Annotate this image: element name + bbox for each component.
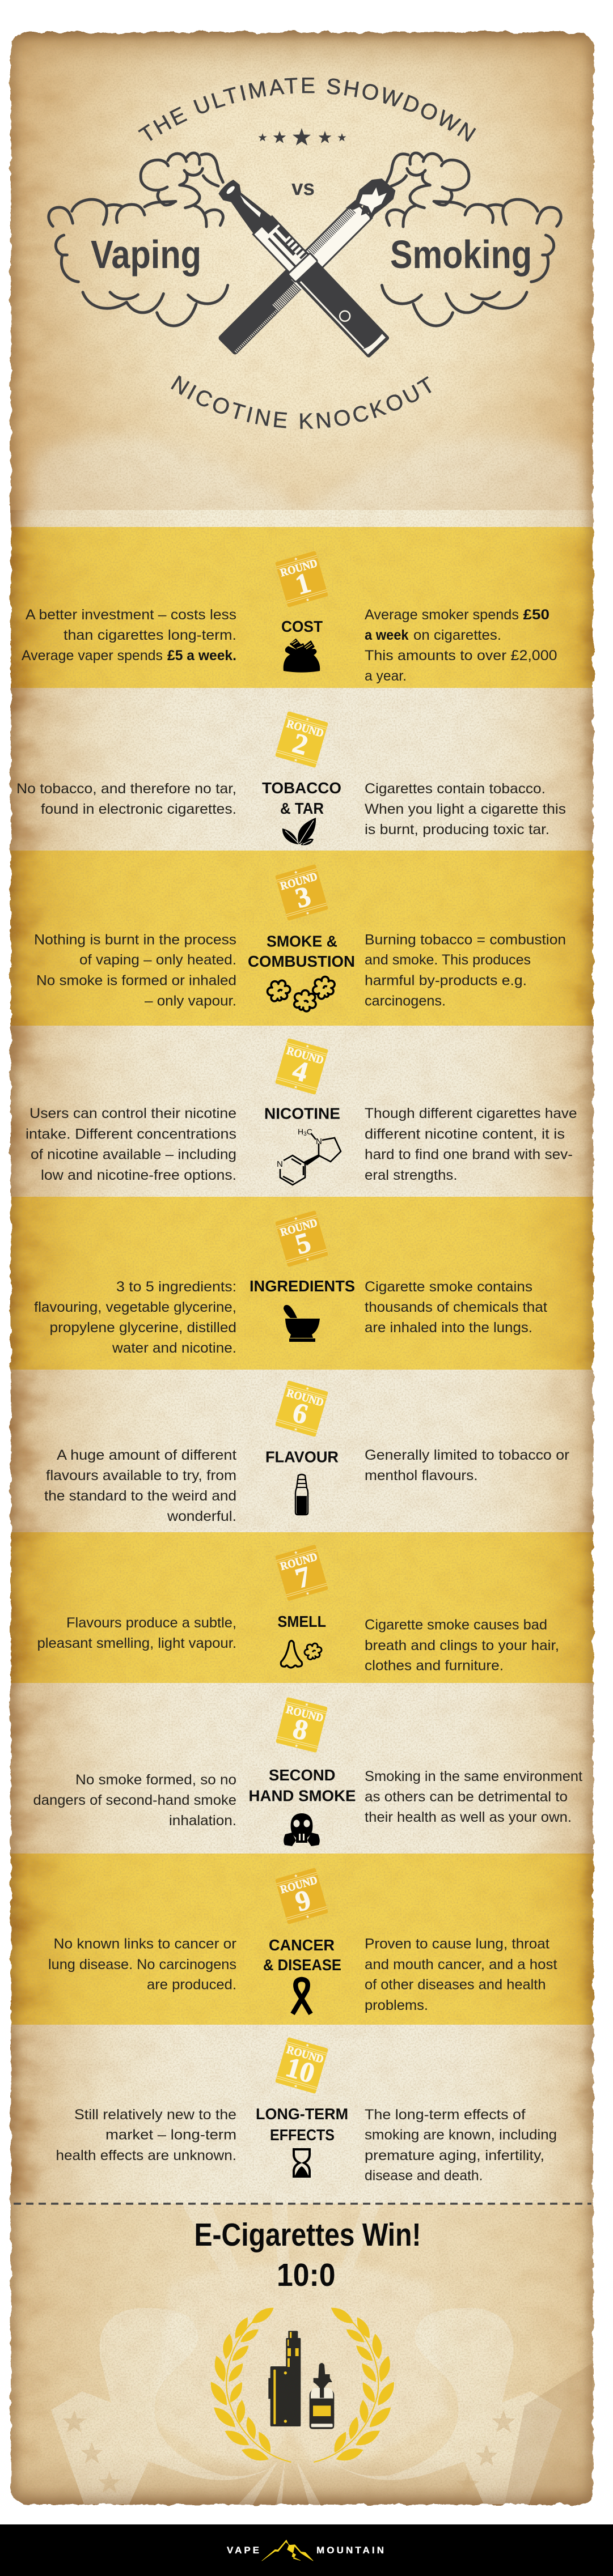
round badge 5 [275, 1210, 328, 1267]
icon: vaping cloud [49, 153, 228, 326]
vaping text: flavouring, vegetable glycerine, [34, 1299, 236, 1315]
vaping text: pleasant smelling, light vapour. [37, 1635, 236, 1651]
vaping text [37, 1615, 236, 1651]
heading: NICOTINE [264, 1105, 340, 1122]
icon: nicotine molecule: H [298, 1127, 303, 1136]
icon: mountain logo [262, 2540, 313, 2561]
heading [256, 2105, 348, 2144]
result heading [194, 2217, 421, 2293]
smoking text: The long-term effects of [365, 2107, 526, 2123]
icon: mortar and pestle [284, 1305, 320, 1342]
vaping text: market – long-term [105, 2127, 236, 2143]
smoking text: smoking are known, including [365, 2127, 557, 2143]
round badge 7 [275, 1544, 328, 1601]
vaping text: Average vaper spends [22, 648, 163, 664]
heading: HAND SMOKE [248, 1787, 356, 1804]
round badge 8 [276, 1697, 328, 1753]
icon: nose and smell puff [281, 1641, 324, 1668]
smoking text: and smoke. This produces [365, 952, 531, 968]
smoking text [365, 1447, 569, 1483]
vaping text [22, 607, 236, 664]
round badge 4: 4 [289, 1053, 312, 1088]
vaping text: No smoke is formed or inhaled [36, 972, 236, 988]
header title block [49, 74, 561, 434]
vaping label: Vaping [91, 232, 201, 277]
round badge 10: ROUND [285, 2043, 325, 2066]
icon: smoke puffs [265, 973, 339, 1014]
smoking text: eral strengths. [365, 1167, 457, 1183]
title arc: the ultimate showdown: THE ULTIMATE SHOWDOWN [138, 77, 476, 142]
round badge 7: 7 [291, 1560, 314, 1595]
icon: nicotine molecule: N [277, 1159, 283, 1169]
heading: & TAR [280, 800, 324, 817]
panel: round 1 cost [22, 551, 557, 684]
heading: TOBACCO [262, 779, 341, 797]
smoking text: Cigarette smoke causes bad [365, 1617, 547, 1633]
icon: nicotine molecule: N [316, 1137, 322, 1146]
heading: INGREDIENTS [250, 1277, 355, 1295]
heading [263, 1936, 341, 1974]
vaping text: found in electronic cigarettes. [41, 801, 236, 817]
logo word: mountain: MOUNTAIN [316, 2545, 384, 2556]
icon: e-cigarette [214, 175, 390, 359]
round badge 9: 9 [291, 1883, 314, 1918]
smoking text: Proven to cause lung, throat [365, 1936, 549, 1952]
panel: round 2 tobacco and tar [16, 711, 566, 845]
heading: SMOKE & [267, 933, 337, 950]
round badge 7: ROUND [279, 1550, 319, 1573]
vaping text: lung disease. No carcinogens [48, 1957, 236, 1973]
ghost boxing gloves and rays [51, 2204, 593, 2505]
smoking text: is burnt, producing toxic tar. [365, 822, 549, 838]
vaping text: intake. Different concentrations [26, 1127, 236, 1142]
vaping text [16, 781, 236, 817]
vaping text: propylene glycerine, distilled [50, 1320, 236, 1336]
smoking text: different nicotine content, it is [365, 1127, 565, 1142]
smoking text: menthol flavours. [365, 1468, 477, 1483]
heading: & DISEASE [263, 1956, 341, 1974]
round badge 10: 10 [282, 2051, 319, 2089]
round badge 6: ROUND [285, 1387, 325, 1409]
vaping text [56, 2107, 236, 2163]
smoking text: on cigarettes. [413, 627, 501, 643]
subtitle arc: nicotine knockout [121, 343, 487, 434]
round badge 3: ROUND [279, 870, 319, 892]
heading: CANCER [269, 1936, 335, 1954]
smoking text [365, 1279, 547, 1336]
round badge 1: ROUND [279, 557, 319, 579]
smoking text [365, 932, 566, 1009]
heading: SECOND [269, 1766, 336, 1784]
result heading: 10:0 [277, 2257, 336, 2293]
panel: round 7 smell [37, 1544, 559, 1674]
icon: awareness ribbon [293, 1979, 311, 2014]
panel: round 9 cancer and disease [48, 1868, 557, 2014]
round badge 6 [275, 1380, 328, 1437]
pale smoke shape above first round [23, 436, 590, 535]
smoking text: their health as well as your own. [365, 1809, 572, 1825]
vaping text: of vaping – only heated. [79, 952, 236, 968]
round badge 5: ROUND [279, 1217, 319, 1239]
vaping text: flavours available to try, from [46, 1468, 236, 1483]
icon: gas mask [284, 1813, 320, 1846]
vaping text: inhalation. [169, 1813, 236, 1829]
vaping text: Users can control their nicotine [29, 1106, 236, 1121]
heading: LONG-TERM [256, 2105, 348, 2123]
vaping text: are produced. [147, 1976, 236, 1992]
heading: COMBUSTION [248, 953, 355, 970]
vaping text: health effects are unknown. [56, 2148, 236, 2163]
smoking text: £50 [523, 607, 549, 623]
vaping text: No tobacco, and therefore no tar, [16, 781, 236, 797]
smoking text: disease and death. [365, 2168, 483, 2184]
vaping text [33, 1772, 236, 1829]
smoking text: are inhaled into the lungs. [365, 1320, 532, 1336]
smoking text: a week [365, 627, 409, 643]
heading: COST [281, 618, 323, 635]
result heading: E-Cigarettes Win! [194, 2217, 421, 2253]
smoking text: This amounts to over £2,000 [365, 648, 557, 664]
smoking text [365, 1617, 559, 1674]
icon: money bag [284, 639, 320, 673]
heading: SMELL [278, 1613, 326, 1630]
smoking text: Cigarette smoke contains [365, 1279, 532, 1295]
smoking text [365, 1106, 577, 1183]
heading [262, 779, 341, 817]
round badge 2 [275, 711, 328, 768]
smoking text: thousands of chemicals that [365, 1299, 547, 1315]
round badge 8: 8 [290, 1712, 311, 1746]
smoking text: Smoking in the same environment [365, 1769, 582, 1784]
vaping text: the standard to the weird and [44, 1488, 236, 1504]
vaping text: £5 a week. [167, 648, 236, 664]
panel: round 8 second hand smoke [33, 1697, 582, 1846]
icon: vape mod and e-liquid bottle [268, 2331, 334, 2429]
smoking text: Generally limited to tobacco or [365, 1447, 569, 1463]
logo word: vape: VAPE [227, 2545, 259, 2556]
smoking text [365, 607, 557, 684]
round badge 1 [275, 551, 328, 607]
icon: hourglass [294, 2149, 310, 2177]
round badge 8: ROUND [285, 1703, 324, 1724]
round badge 2: 2 [289, 726, 312, 761]
panel: round 3 smoke and combustion [34, 864, 566, 1014]
title arc: the ultimate showdown [91, 74, 526, 194]
icon: laurel wreath [206, 2304, 398, 2464]
smoking text: hard to find one brand with sev- [365, 1147, 573, 1163]
icon: nicotine molecule: 3 [303, 1131, 307, 1137]
heading: FLAVOUR [265, 1448, 339, 1465]
round badge 4 [275, 1038, 328, 1095]
smoking text [365, 781, 566, 838]
panel: round 4 nicotine [26, 1038, 577, 1185]
vaping text: A huge amount of different [57, 1447, 236, 1463]
round badge 3: 3 [291, 879, 314, 914]
icon: smoking cloud [382, 153, 561, 326]
vaping text: A better investment – costs less [26, 607, 236, 623]
vaping text: wonderful. [167, 1508, 236, 1524]
vaping text: No smoke formed, so no [75, 1772, 236, 1788]
vaping text: dangers of second-hand smoke [33, 1792, 236, 1808]
icon: tobacco leaves [282, 818, 316, 845]
round badge 9 [275, 1868, 328, 1924]
smoking text: Cigarettes contain tobacco. [365, 781, 546, 797]
smoking text: problems. [365, 1997, 428, 2013]
panel: round 5 ingredients [34, 1210, 547, 1356]
vs label: vs [291, 176, 315, 200]
round badge 2: ROUND [285, 717, 325, 740]
smoking text: Burning tobacco = combustion [365, 932, 566, 947]
smoking text: and mouth cancer, and a host [365, 1957, 557, 1973]
vaping text: Still relatively new to the [74, 2107, 236, 2123]
smoking text: Average smoker spends [365, 607, 519, 623]
round badge 9: ROUND [279, 1874, 319, 1896]
icon: cigarette [214, 172, 399, 356]
heading: EFFECTS [270, 2126, 335, 2144]
yellow round bands [0, 527, 613, 2025]
round badge 5: 5 [291, 1226, 314, 1260]
smoking text [365, 1936, 557, 2013]
panel: round 6 flavour [44, 1380, 569, 1524]
round badge 10 [275, 2037, 328, 2094]
round badge 1: 1 [291, 566, 314, 601]
smoking text: as others can be detrimental to [365, 1789, 568, 1805]
icon: e-liquid bottle [295, 1474, 308, 1515]
smoking text: premature aging, infertility, [365, 2148, 544, 2163]
vaping text: No known links to cancer or [53, 1936, 236, 1952]
vaping text: low and nicotine-free options. [41, 1167, 236, 1183]
smoking text: Though different cigarettes have [365, 1106, 577, 1121]
smoking text: clothes and furniture. [365, 1658, 504, 1674]
icon: five stars [258, 128, 346, 146]
vaping text [44, 1447, 236, 1524]
smoking label: Smoking [390, 232, 532, 277]
vaping text: – only vapour. [145, 993, 236, 1009]
smoking text [365, 1769, 582, 1825]
vaping text: 3 to 5 ingredients: [116, 1279, 236, 1295]
footer bar [0, 2524, 613, 2576]
vaping text: water and nicotine. [112, 1340, 236, 1356]
vaping text: than cigarettes long-term. [64, 627, 236, 643]
icon: nicotine molecule [277, 1127, 341, 1185]
pale round bands [0, 688, 613, 2204]
vaping text [34, 1279, 236, 1356]
smoking text [365, 2107, 557, 2184]
smoking text: breath and clings to your hair, [365, 1638, 559, 1653]
round badge 6: 6 [289, 1396, 312, 1430]
vaping text [48, 1936, 236, 1992]
vaping text: Nothing is burnt in the process [34, 932, 236, 947]
smoking text: of other diseases and health [365, 1976, 546, 1992]
icon: nicotine molecule: C [307, 1127, 312, 1136]
smoking text: a year. [365, 668, 407, 684]
vaping text [26, 1106, 236, 1183]
vaping text: Flavours produce a subtle, [66, 1615, 236, 1631]
round badge 3 [275, 864, 328, 921]
smoking text: carcinogens. [365, 993, 446, 1009]
heading [248, 1766, 356, 1804]
smoking text: harmful by-products e.g. [365, 972, 527, 988]
smoking text: When you light a cigarette this [365, 801, 566, 817]
subtitle arc: nicotine knockout: NICOTINE KNOCKOUT [171, 375, 432, 429]
vaping text [34, 932, 236, 1009]
vaping text: of nicotine available – including [31, 1147, 236, 1163]
heading [248, 933, 355, 970]
round badge 4: ROUND [285, 1044, 325, 1067]
panel: round 10 long-term effects [56, 2037, 557, 2184]
